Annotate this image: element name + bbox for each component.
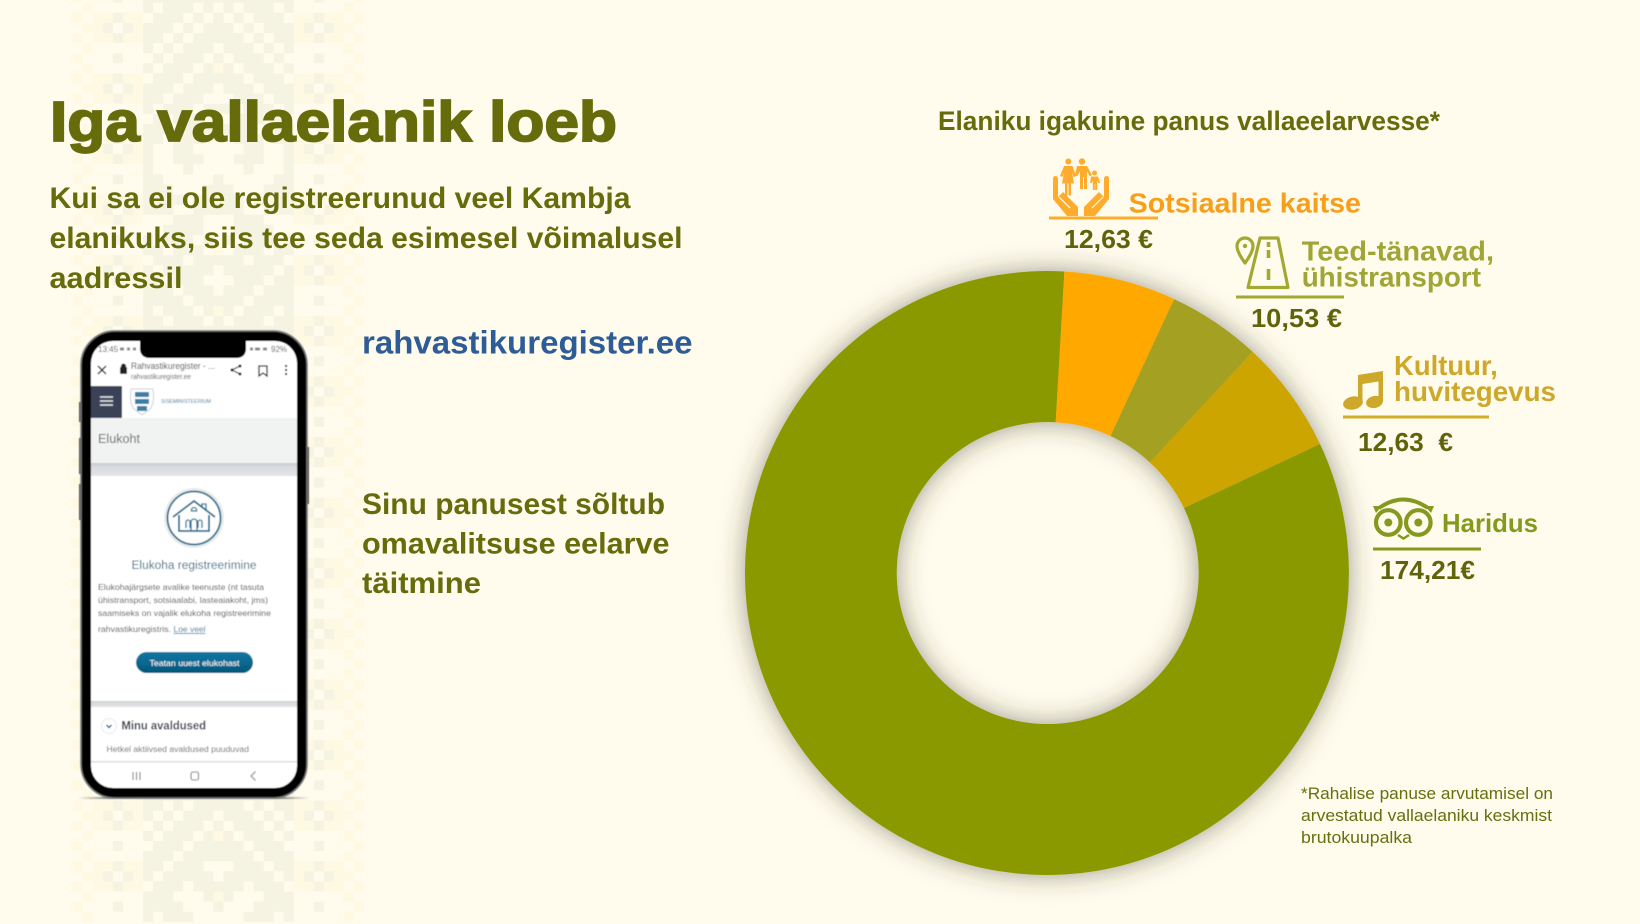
page heading Elukoht: Elukoht: [98, 431, 140, 446]
my applications section: Hetkel aktiivsed avaldused puuduvad: [106, 745, 249, 754]
footnote: [1301, 785, 1553, 847]
label: Kultuur: [1343, 350, 1556, 457]
segment: Sotsiaalne kaitse: [1056, 272, 1174, 436]
label: Haridus: 174,21€: [1380, 555, 1475, 585]
label: Teed-tänavad: 10,53 €: [1251, 303, 1342, 333]
icon: house in circle: [164, 488, 224, 548]
button: Teatan uuest elukohast: [150, 658, 240, 668]
android navigation: [133, 772, 256, 780]
segment: Kultuur: [1150, 352, 1320, 508]
label: Kultuur: 12,63 €: [1358, 427, 1453, 457]
status bar: 13:45: [98, 345, 119, 354]
page heading Elukoht: [91, 418, 297, 476]
status bar: [98, 345, 287, 354]
icon: owl eyes: [1373, 500, 1434, 538]
my applications section: [91, 701, 297, 762]
subheading: register invitation: elanikuks, siis tee seda esimesel võimalusel: [50, 222, 682, 255]
phone screen: [91, 341, 297, 788]
footnote: arvestatud vallaelaniku keskmist: [1301, 807, 1552, 825]
title: Iga vallaelanik loeb: [50, 90, 617, 154]
label: Teed-tänavad: ühistransport: [1302, 262, 1481, 292]
browser bar: rahvastikuregister.ee: [131, 374, 191, 381]
browser bar: [98, 361, 286, 381]
site header: [91, 386, 211, 418]
segment: Haridus: [745, 271, 1349, 875]
chart heading: Elaniku igakuine panus vallaeelarvesse*: [938, 106, 1440, 136]
phone shadow: [78, 797, 310, 799]
residence registration text: saamiseks on vajalik elukoha registreerimine: [98, 608, 271, 618]
phone screenshot: [78, 331, 310, 799]
label: Teed-tänavad: Teed-tänavad,: [1302, 236, 1494, 266]
my applications section: Minu avaldused: [122, 720, 206, 732]
donut chart: [745, 271, 1349, 875]
segment: Teed-tänavad: [1111, 299, 1253, 462]
residence registration text: Elukohajärgsete avalike teenuste (nt tasuta: [98, 582, 264, 592]
button: [136, 652, 253, 673]
footnote: *Rahalise panuse arvutamisel on: [1301, 785, 1553, 803]
label: Kultuur: huvitegevus: [1394, 376, 1556, 407]
label: Haridus: Haridus: [1442, 508, 1538, 538]
subheading: register invitation: aadressil: [50, 262, 182, 295]
icon: hands holding family: [1053, 158, 1109, 216]
residence registration text: Elukoha registreerimine: [132, 560, 256, 572]
subheading: register invitation: Kui sa ei ole registreerunud veel Kambja: [50, 182, 631, 215]
phone body: [81, 331, 307, 798]
icon: road and map pin: [1237, 238, 1288, 288]
residence registration text: [98, 560, 271, 634]
site header: SISEMINISTEERIUM: [161, 399, 211, 405]
budget contribution message: täitmine: [362, 567, 481, 600]
budget contribution message: Sinu panusest sõltub: [362, 488, 665, 521]
background folk pattern: [73, 0, 364, 922]
label: Sotsiaalne kaitse: 12,63 €: [1064, 224, 1153, 254]
budget contribution message: omavalitsuse eelarve: [362, 528, 670, 560]
subheading: register invitation: [50, 182, 682, 295]
browser bar: Rahvastikuregister - ...: [131, 361, 215, 372]
website address: rahvastikuregister.ee: [362, 324, 692, 360]
footnote: brutokuupalka: [1301, 829, 1413, 847]
label: Kultuur: Kultuur,: [1394, 350, 1498, 381]
label: Sotsiaalne kaitse: [1049, 188, 1361, 254]
label: Sotsiaalne kaitse: Sotsiaalne kaitse: [1129, 188, 1361, 218]
budget contribution message: [362, 488, 670, 600]
notch: [140, 340, 246, 358]
status bar: 92%: [271, 345, 287, 354]
icon: music notes: [1342, 371, 1384, 411]
residence registration text: ühistransport, sotsiaalabi, lasteaiakoht, jms): [98, 595, 268, 605]
residence registration text: Loe veel: [174, 624, 206, 634]
label: Teed-tänavad: [1236, 236, 1494, 333]
residence registration text: rahvastikuregistris.: [98, 624, 171, 634]
phone side buttons: [79, 402, 309, 520]
label: Haridus: [1373, 508, 1538, 585]
